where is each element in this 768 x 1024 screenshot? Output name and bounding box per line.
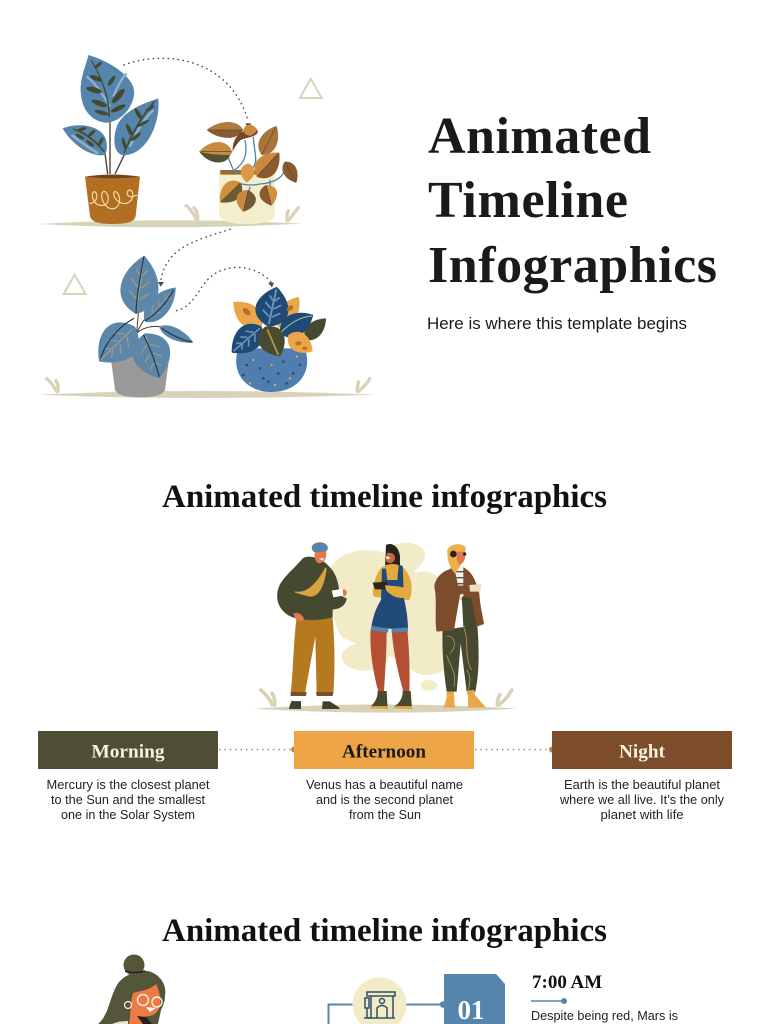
- dotted connector: morning to afternoon: [219, 746, 297, 752]
- arrow heads: [158, 123, 274, 287]
- timeline connector: [328, 1004, 441, 1024]
- night text: planet with life: [600, 807, 684, 822]
- woman in overalls: [370, 544, 412, 709]
- shelf top: [38, 206, 303, 227]
- title: Animated: [428, 108, 651, 165]
- plant 3: grey pot: [86, 253, 196, 397]
- panel: morning: [38, 731, 218, 822]
- plant 1: orange pot: [63, 55, 159, 224]
- afternoon text: and is the second planet: [316, 792, 453, 807]
- morning label: Morning: [92, 742, 165, 762]
- shelf bottom: [38, 379, 377, 398]
- morning text: [46, 777, 210, 822]
- people illustration: [253, 542, 517, 713]
- icon circle: booth: [352, 978, 406, 1024]
- number tag 01: [440, 974, 505, 1024]
- panel: night: [552, 731, 732, 822]
- background blob: [328, 543, 444, 691]
- section heading 1: Animated timeline infographics: [162, 479, 607, 515]
- morning text: to the Sun and the smallest: [51, 792, 205, 807]
- time underline: [531, 998, 567, 1004]
- dotted connector: afternoon to night: [475, 746, 555, 752]
- time heading: 7:00 AM: [532, 972, 602, 993]
- afternoon text: from the Sun: [349, 807, 421, 822]
- triangle outlines: [64, 79, 322, 294]
- man with hoodie: [277, 542, 347, 709]
- plant illustration: [38, 55, 377, 398]
- title: [428, 108, 717, 294]
- night text: [559, 777, 724, 822]
- time description: Despite being red, Mars is: [531, 1008, 678, 1023]
- plant 4: blue pot: [223, 283, 331, 392]
- ground: [253, 690, 517, 713]
- panel: afternoon: [294, 731, 474, 822]
- night label: Night: [619, 742, 666, 762]
- section heading 2: Animated timeline infographics: [162, 913, 607, 949]
- dotted arrows: [124, 58, 272, 311]
- plant 2: cream pot: [199, 122, 302, 224]
- afternoon text: Venus has a beautiful name: [306, 777, 463, 792]
- night text: Earth is the beautiful planet: [564, 777, 720, 792]
- afternoon text: [306, 777, 463, 822]
- title: Infographics: [428, 237, 717, 294]
- title: Timeline: [428, 172, 628, 229]
- woman with headphones: [434, 544, 486, 708]
- woman portrait: [98, 954, 165, 1024]
- afternoon label: Afternoon: [342, 742, 426, 762]
- subtitle: Here is where this template begins: [427, 315, 687, 333]
- morning text: one in the Solar System: [61, 807, 195, 822]
- night text: where we all live. It’s the only: [559, 792, 724, 807]
- morning text: Mercury is the closest planet: [46, 777, 210, 792]
